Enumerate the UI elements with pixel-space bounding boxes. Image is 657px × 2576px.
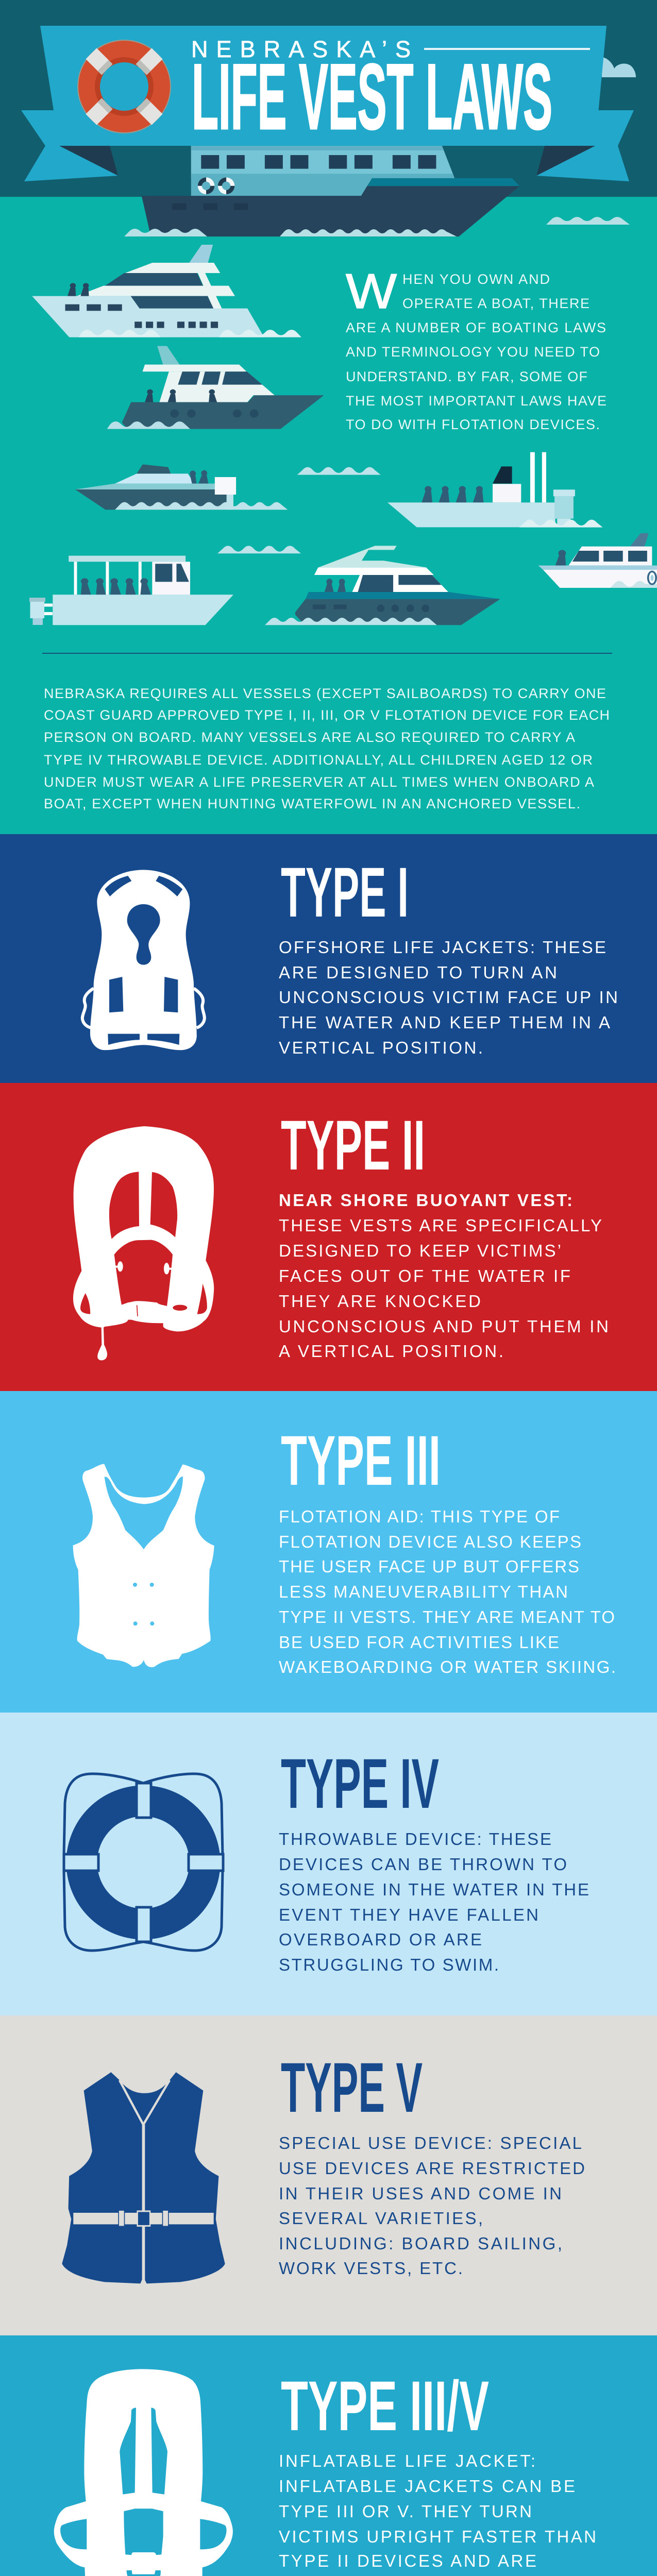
icon: near shore buoyant vest [73,1126,214,1360]
text block: Type III description: FLOTATION DEVICE ALSO KEEPS [279,1532,581,1551]
text block: Type IV description: OVERBOARD OR ARE [279,1930,482,1949]
text block: Type V description: SPECIAL USE DEVICE: SPECIAL [279,2133,582,2153]
text block: Type III description: FLOTATION AID: THIS TYPE OF [279,1507,560,1526]
text block: Type V description: SEVERAL VARIETIES, [279,2209,483,2228]
text block: Nebraska requirements [44,686,610,811]
text block: Type III/V description: INFLATABLE JACKETS CAN BE [279,2477,575,2496]
illustration: small speedboat [75,464,288,510]
text block: Type III/V description: TYPE III OR V. THEY TURN [279,2502,532,2521]
text block: Type II description: A VERTICAL POSITION. [279,1342,503,1361]
heading: Type IV: TYPE IV [281,1744,439,1823]
illustration: white yacht [32,245,301,337]
waves under large ship [124,217,630,236]
text block: Type II description: THEY ARE KNOCKED [279,1292,481,1311]
text block: intro paragraph: THE MOST IMPORTANT LAWS HAVE [346,393,607,409]
text block: Type III/V description: INFLATABLE LIFE JACKET: [279,2451,535,2470]
icon: orange life ring [77,40,171,133]
divider line [42,653,612,654]
text block: Type IV description: EVENT THEY HAVE FALLEN [279,1905,538,1924]
panel: Type V [0,2015,657,2335]
text block: Type V description: IN THEIR USES AND COME IN [279,2184,562,2203]
text block: Type I description: OFFSHORE LIFE JACKETS: THESE [279,938,606,957]
illustration: canopy passenger boat [29,556,233,625]
panel: Type IV [0,1713,657,2015]
panel: Type I [0,834,657,1083]
text block: Nebraska requirements: TYPE IV THROWABLE DEVICE. ADDITIONALLY, ALL CHILDREN AGED 12 OR [44,752,593,768]
text block: intro paragraph: AND TERMINOLOGY YOU NEED TO [346,344,600,360]
heading: Type III: TYPE III [281,1421,441,1500]
text block: Type III description: LESS MANEUVERABILITY THAN [279,1582,568,1601]
panel: teal water introduction [0,197,657,834]
text block: Type III description [279,1507,616,1676]
title: Nebraska's: NEBRASKA’S [191,36,411,62]
text block: Type V description [279,2133,585,2278]
icon: inflatable life jacket [54,2369,233,2576]
text block: Type IV description: STRUGGLING TO SWIM. [279,1955,499,1974]
text block: Type V description: WORK VESTS, ETC. [279,2259,463,2278]
text block: Nebraska requirements: NEBRASKA REQUIRES ALL VESSELS (EXCEPT SAILBOARDS) TO CARRY ONE [44,686,606,701]
text block: Nebraska requirements: BOAT, EXCEPT WHEN HUNTING WATERFOWL IN AN ANCHORED VESSEL. [44,796,580,811]
panel: Type II [0,1083,657,1391]
waves: floating crests [217,467,381,553]
icon: throwable ring buoy [64,1774,223,1951]
text block: intro paragraph: TO DO WITH FLOTATION DEVICES. [346,417,600,432]
icon: offshore life jacket [82,870,205,1050]
banner ribbon [21,26,634,181]
text block: Type III description: THE USER FACE UP BUT OFFERS [279,1557,579,1576]
text block: Type II description [279,1191,609,1361]
panel: Type III [0,1391,657,1713]
text block: Type III description: TYPE II VESTS. THEY ARE MEANT TO [279,1607,615,1626]
text block: Nebraska requirements: PERSON ON BOARD. MANY VESSELS ARE ALSO REQUIRED TO CARRY A [44,730,575,745]
text block: Type II description: THESE VESTS ARE SPECIFICALLY [279,1216,602,1235]
text block: Type IV description: SOMEONE IN THE WATER IN THE [279,1880,589,1899]
text block: Type II description: UNCONSCIOUS AND PUT THEM IN [279,1317,609,1336]
text block: Nebraska requirements: UNDER MUST WEAR A LIFE PRESERVER AT ALL TIMES WHEN ONBOARD A [44,774,594,790]
illustration: large ship under the banner [142,146,519,236]
text block: Type IV description: THROWABLE DEVICE: THESE [279,1829,551,1849]
text block: intro paragraph [346,272,607,432]
text block: Type I description [279,938,618,1057]
illustration: dark hull cruiser [107,346,324,429]
text block: intro paragraph: HEN YOU OWN AND [402,272,550,287]
icon: cloud [602,57,636,77]
heading: Type V: TYPE V [281,2048,423,2127]
illustration: steam boat with passengers [388,452,603,528]
heading: Type II: TYPE II [281,1106,425,1185]
text block: Type I description: ARE DESIGNED TO TURN AN [279,963,557,982]
text block: Type II description: NEAR SHORE BUOYANT VEST: [279,1191,572,1210]
icon: flotation vest [73,1462,214,1667]
panel: Type III/V [0,2335,657,2576]
text block: Type IV description [279,1829,589,1974]
text block: Type V description: INCLUDING: BOARD SAILING, [279,2234,562,2253]
text block: Type III description: BE USED FOR ACTIVITIES LIKE [279,1633,559,1652]
text block: intro paragraph: OPERATE A BOAT, THERE [402,296,589,311]
text block: Type I description: UNCONSCIOUS VICTIM FACE UP IN [279,988,618,1007]
heading: Type I: TYPE I [281,853,409,932]
text block: Type III/V description: VICTIMS UPRIGHT FASTER THAN [279,2527,596,2546]
text block: Type III description: WAKEBOARDING OR WATER SKIING. [279,1657,616,1676]
text block: Type II description: DESIGNED TO KEEP VICTIMS’ [279,1241,561,1260]
title rule [424,48,590,50]
heading: Type III/V: TYPE III/V [281,2367,489,2446]
panel: header sky [0,0,657,197]
text block: intro paragraph: ARE A NUMBER OF BOATING LAWS [346,320,606,335]
illustration: flybridge yacht [265,546,500,625]
intro drop cap W: W [346,264,397,319]
text block: Type IV description: DEVICES CAN BE THROWN TO [279,1855,567,1874]
illustration: white boat cut off at right edge [538,533,657,588]
text block: Type III/V description: TYPE II DEVICES AND ARE [279,2551,536,2570]
text block: Nebraska requirements: COAST GUARD APPROVED TYPE I, II, III, OR V FLOTATION DEVICE FOR EACH [44,707,610,723]
text block: Type I description: VERTICAL POSITION. [279,1038,483,1057]
icon: special use vest [62,2072,225,2283]
text block: Type II description: FACES OUT OF THE WATER IF [279,1266,570,1285]
text block: intro paragraph: UNDERSTAND. BY FAR, SOME OF [346,369,587,384]
text block: Type V description: USE DEVICES ARE RESTRICTED [279,2159,585,2178]
text block: Type I description: THE WATER AND KEEP THEM IN A [279,1013,610,1032]
text block: Type III/V description [279,2451,596,2576]
